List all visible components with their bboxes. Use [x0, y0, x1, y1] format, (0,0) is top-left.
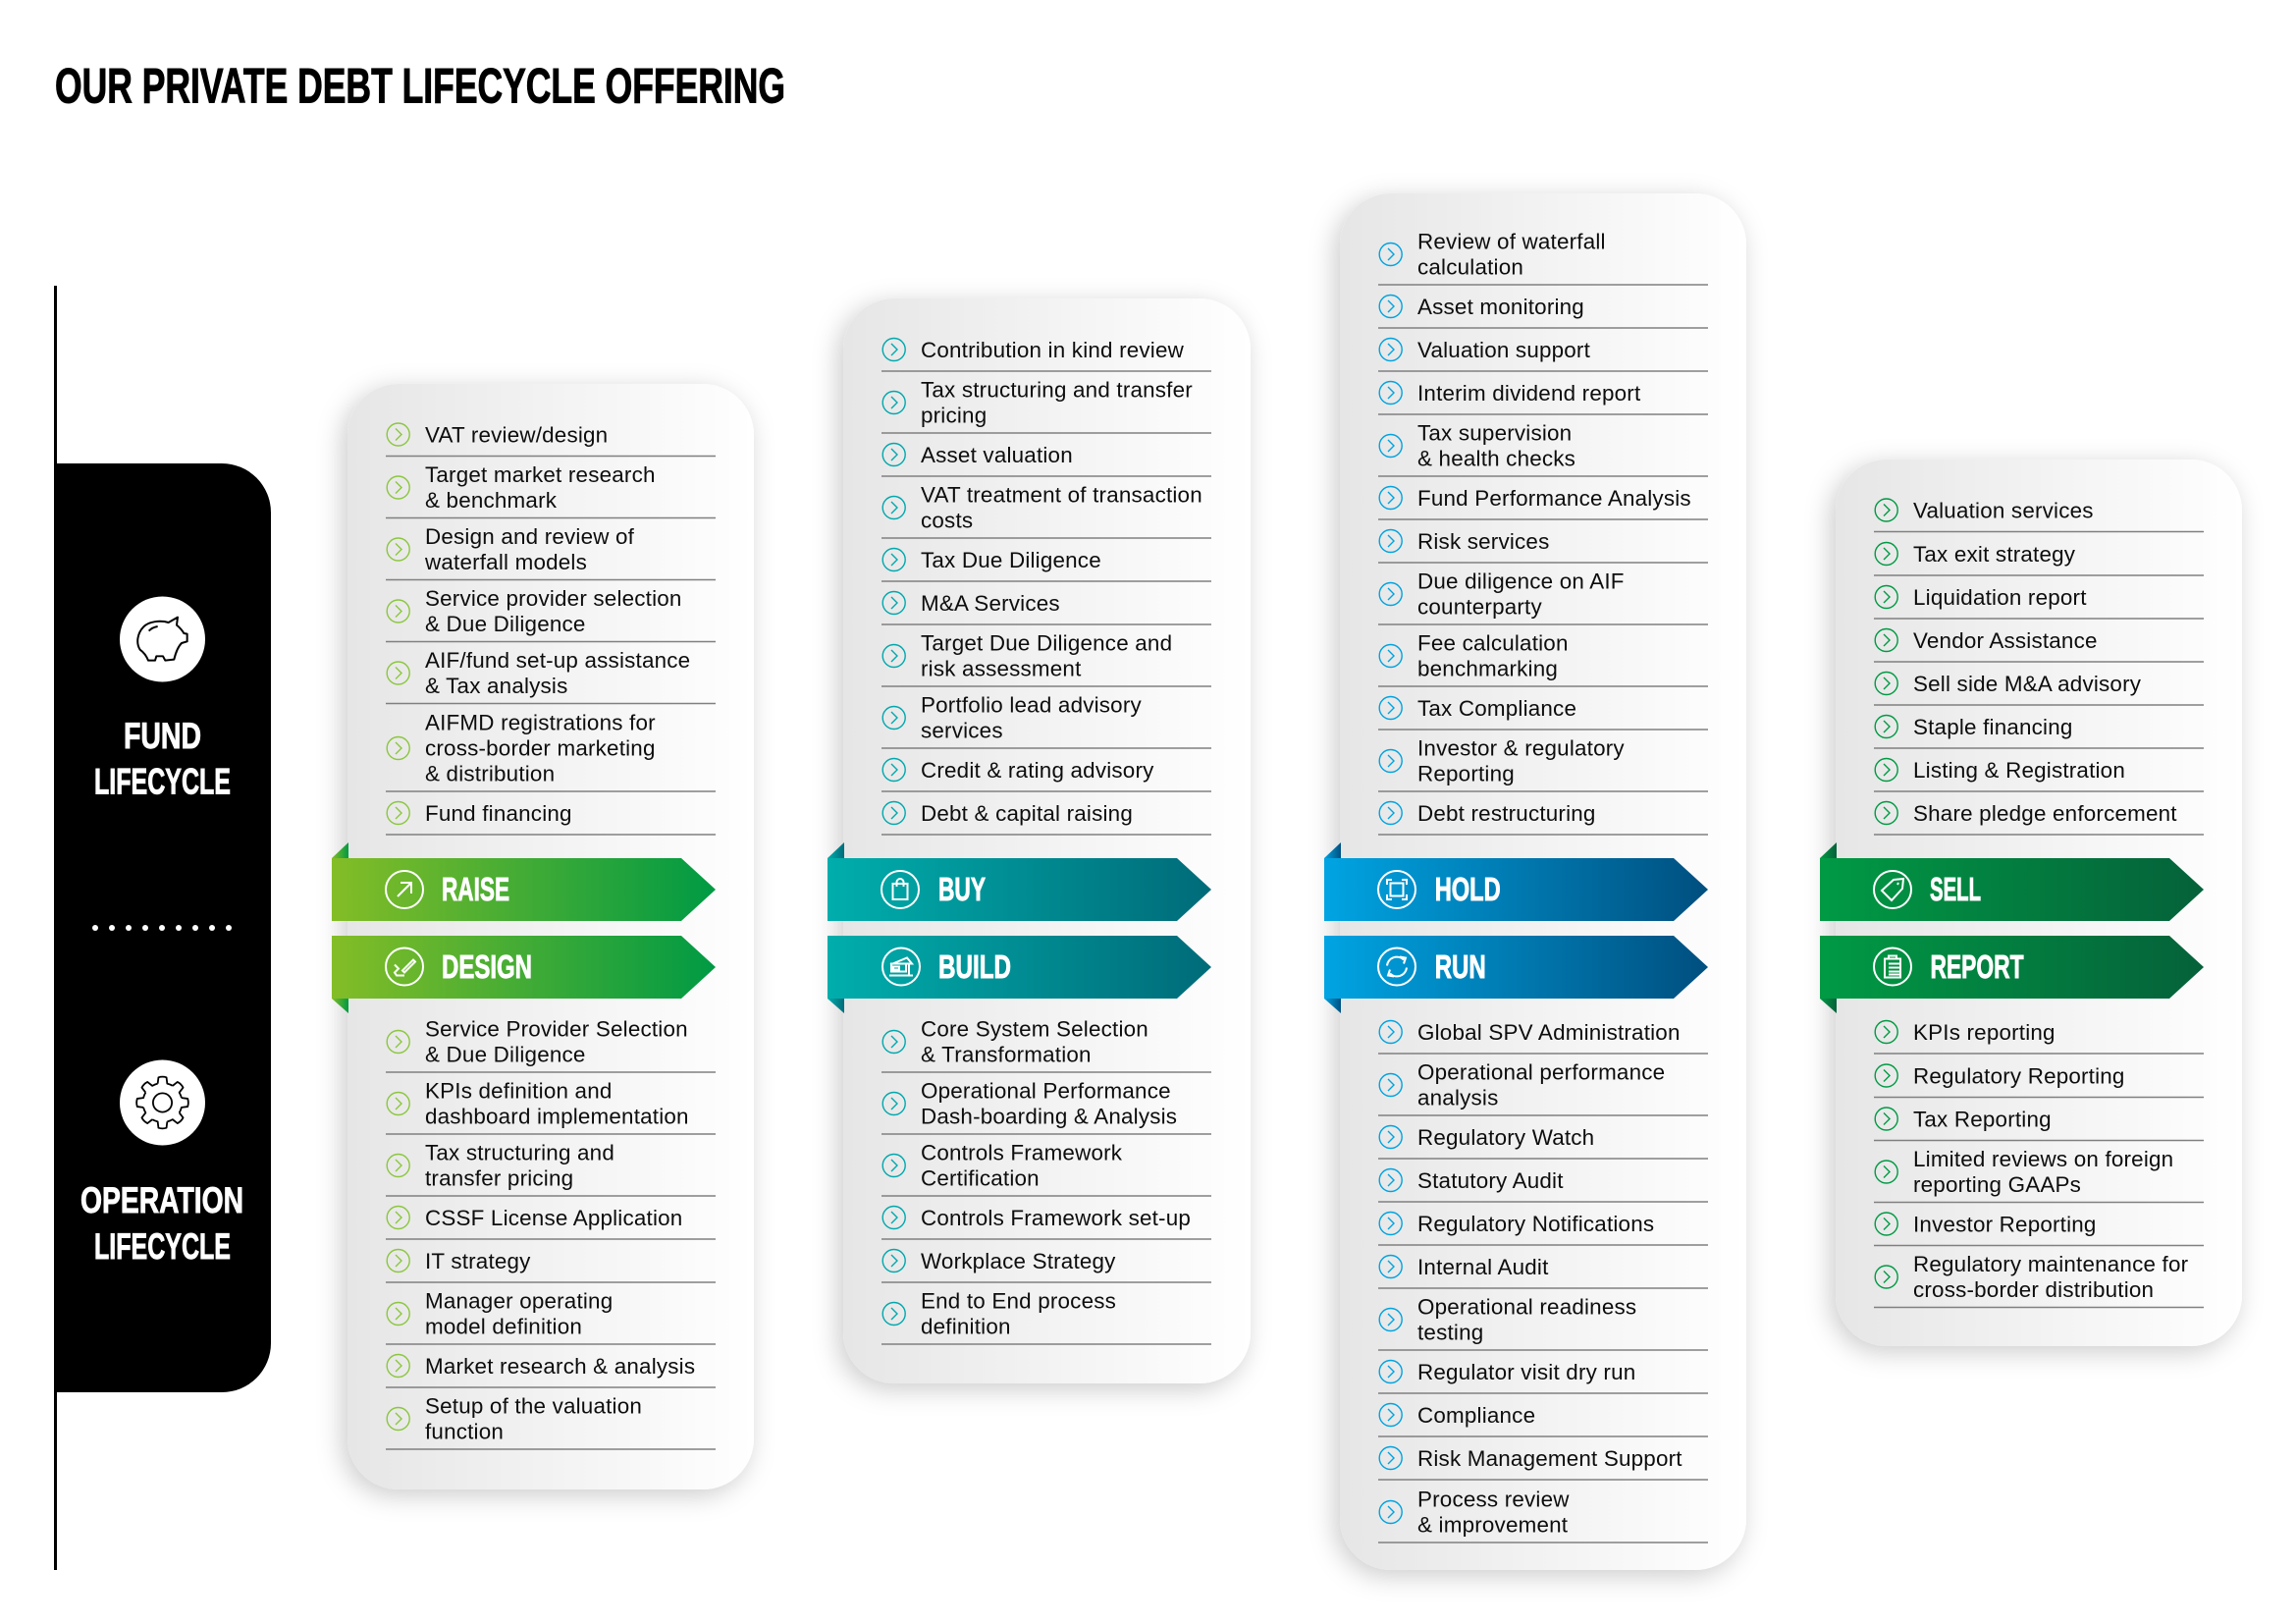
item: Operational readiness testing: Operational readiness	[1417, 1294, 1636, 1320]
black sidebar panel	[54, 463, 271, 1392]
item: Target market research: Target market research	[425, 462, 656, 487]
item: Target Due Diligence: Target Due Diligence and	[921, 630, 1172, 656]
panel: hold and run	[1340, 193, 1746, 1570]
item: Investor & regulatory Reporting: Investor & regulatory	[1417, 736, 1625, 760]
item: Fee calculation benchmarking	[1378, 630, 1708, 686]
heading: fund lifecycle	[94, 716, 231, 801]
heading: operation lifecycle	[80, 1180, 243, 1267]
item: Credit & rating advisory	[881, 758, 1211, 791]
item: Target market research	[386, 462, 716, 518]
item: Operational Performance: Dash-boarding & Analysis	[921, 1104, 1177, 1129]
item: Listing & Registration	[1874, 758, 2204, 791]
item: Limited reviews on foreign reporting GAAPs: Limited reviews on foreign	[1913, 1147, 2173, 1171]
item: KPIs definition	[386, 1078, 716, 1134]
item: VAT treatment: VAT treatment of transaction	[921, 483, 1202, 507]
heading: operation lifecycle: LIFECYCLE	[94, 1226, 231, 1267]
item: Valuation services	[1874, 499, 2204, 532]
item: Risk Management Support	[1378, 1446, 1708, 1480]
item: Controls Framework Certification	[881, 1141, 1211, 1196]
item: Liquidation report	[1874, 585, 2204, 619]
item: Tax supervision: Tax supervision	[1417, 420, 1572, 446]
item: Investor Reporting: Investor Reporting	[1913, 1212, 2097, 1237]
banner: raise	[332, 842, 716, 921]
item: Tax Compliance: Tax Compliance	[1417, 696, 1576, 721]
item: AIFMD registrations: cross-border marketing	[425, 736, 656, 760]
item: Risk services: Risk services	[1417, 529, 1549, 554]
banner: run	[1324, 936, 1708, 1013]
panel: raise and design	[347, 384, 754, 1489]
item: Process review & improvement: Process review	[1417, 1487, 1570, 1512]
item: KPIs reporting: KPIs reporting	[1913, 1020, 2056, 1045]
item: Asset valuation	[881, 443, 1211, 476]
item: Global SPV Administration: Global SPV Administration	[1417, 1020, 1681, 1045]
banner: run: RUN	[1435, 948, 1486, 985]
item: Valuation support	[1378, 338, 1708, 371]
item: Design and review of waterfall models	[386, 524, 716, 579]
item: Debt & capital raising: Debt & capital raising	[921, 801, 1133, 826]
item: End to End process definition	[881, 1288, 1211, 1344]
heading: fund lifecycle: FUND	[124, 716, 201, 756]
item: Target market research: & benchmark	[425, 488, 558, 513]
item: Operational Performance	[881, 1078, 1211, 1134]
icon: gear	[120, 1060, 205, 1145]
item: Tax Due Diligence: Tax Due Diligence	[921, 548, 1101, 572]
item: Debt restructuring	[1378, 801, 1708, 835]
item: Tax structuring: Tax structuring and	[425, 1141, 614, 1164]
item: Global SPV Administration	[1378, 1020, 1708, 1054]
item: Asset monitoring: Asset monitoring	[1417, 295, 1584, 319]
item: Regulatory maintenance: cross-border distribution	[1913, 1277, 2154, 1302]
item: Operational readiness testing: testing	[1417, 1320, 1483, 1345]
item: Operational performance analysis	[1378, 1060, 1708, 1115]
item: Tax structuring and transfer pricing	[881, 377, 1211, 433]
item: Share pledge enforcement	[1874, 801, 2204, 835]
item: Tax structuring: transfer pricing	[425, 1166, 573, 1190]
item: Due diligence on AIF counterparty: Due diligence on AIF	[1417, 569, 1625, 593]
item: VAT review/design: VAT review/design	[425, 422, 608, 448]
item: AIF/fund set-up assistance	[386, 648, 716, 703]
item: Asset valuation: Asset valuation	[921, 443, 1073, 467]
item: AIF/fund set-up assistance: & Tax analysis	[425, 674, 568, 698]
item: Investor & regulatory Reporting	[1378, 736, 1708, 791]
item: Manager operating model	[386, 1288, 716, 1344]
item: Contribution in kind review	[881, 338, 1211, 371]
item: Valuation support: Valuation support	[1417, 338, 1591, 362]
item: M&A Services	[881, 591, 1211, 624]
item: Asset monitoring	[1378, 295, 1708, 328]
item: Controls Framework Certification: Controls Framework	[921, 1141, 1123, 1164]
item: Target Due Diligence: risk assessment	[921, 656, 1082, 681]
item: Statutory Audit: Statutory Audit	[1417, 1168, 1564, 1193]
item: Regulator visit dry run: Regulator visit dry run	[1417, 1360, 1635, 1384]
banner: report: REPORT	[1930, 948, 2024, 985]
item: Investor Reporting	[1874, 1212, 2204, 1245]
item: VAT review/design	[386, 422, 716, 456]
item: Regulatory Notifications: Regulatory Notifications	[1417, 1212, 1654, 1236]
item: Due diligence on AIF counterparty	[1378, 569, 1708, 624]
column: buy / build	[828, 298, 1251, 1383]
item: Target Due Diligence	[881, 630, 1211, 686]
dotted separator	[92, 925, 232, 931]
item: Tax supervision	[1378, 420, 1708, 476]
banner: design	[332, 936, 716, 1013]
item: Service provider selection: & Due Diligence	[425, 612, 586, 636]
item: Operational performance analysis: analysis	[1417, 1086, 1498, 1110]
item: Regulatory Reporting: Regulatory Reporting	[1913, 1064, 2125, 1088]
item: Core System Selection: & Transformation	[921, 1043, 1092, 1066]
item: Setup of the valuation function: function	[425, 1420, 504, 1443]
item: KPIs definition: KPIs definition and	[425, 1078, 613, 1104]
item: Portfolio lead advisory: services	[921, 719, 1003, 742]
banner: hold: HOLD	[1435, 871, 1501, 907]
item: Review of waterfall calculation: calculation	[1417, 255, 1523, 279]
item: AIFMD registrations: AIFMD registrations for	[425, 711, 656, 734]
item: Market research: Market research & analysis	[425, 1354, 695, 1379]
item: Valuation services: Valuation services	[1913, 499, 2094, 522]
item: Fund financing: Fund financing	[425, 801, 572, 826]
item: Staple financing: Staple financing	[1913, 715, 2073, 739]
item: M&A Services: M&A Services	[921, 591, 1060, 616]
item: Service Provider Selection: Service Provider Selection	[425, 1017, 688, 1041]
item: IT strategy: IT strategy	[425, 1249, 531, 1273]
item: Liquidation report: Liquidation report	[1913, 585, 2087, 610]
item: Core System Selection	[881, 1017, 1211, 1072]
item: Regulatory maintenance	[1874, 1252, 2204, 1308]
item: AIFMD registrations: & distribution	[425, 762, 555, 785]
title: OUR PRIVATE DEBT LIFECYCLE OFFERING	[55, 59, 785, 114]
vertical rule	[54, 286, 57, 1570]
item: AIFMD registrations	[386, 711, 716, 791]
item: Regulatory Reporting	[1874, 1064, 2204, 1098]
item: Controls Framework set-up: Controls Framework set-up	[921, 1206, 1191, 1230]
item: Tax structuring and transfer pricing: pricing	[921, 403, 987, 428]
item: CSSF License Application: CSSF License Application	[425, 1206, 682, 1230]
heading: fund lifecycle: LIFECYCLE	[94, 762, 231, 801]
item: Tax supervision: & health checks	[1417, 446, 1575, 471]
panel: buy and build	[843, 298, 1251, 1383]
item: Listing & Registration: Listing & Registration	[1913, 758, 2125, 783]
item: Manager operating model: model definition	[425, 1314, 582, 1339]
item: Process review & improvement: & improvement	[1417, 1512, 1569, 1538]
banner: buy: BUY	[938, 871, 986, 907]
item: Credit & rating advisory: Credit & rating advisory	[921, 758, 1154, 783]
item: CSSF License Application	[386, 1206, 716, 1239]
item: Setup of the valuation function: Setup of the valuation	[425, 1394, 642, 1418]
item: Tax structuring	[386, 1141, 716, 1196]
item: KPIs definition: dashboard implementation	[425, 1104, 689, 1129]
item: Market research	[386, 1354, 716, 1387]
item: Fund financing	[386, 801, 716, 835]
banner: report	[1820, 936, 2204, 1013]
item: Operational readiness testing	[1378, 1294, 1708, 1350]
item: Sell side M&A advisory	[1874, 672, 2204, 705]
item: Sell side M&A advisory: Sell side M&A advisory	[1913, 672, 2142, 696]
panel: sell and report	[1836, 460, 2242, 1346]
heading: operation lifecycle: OPERATION	[80, 1180, 243, 1220]
item: Controls Framework Certification: Certification	[921, 1166, 1040, 1190]
item: Regulatory maintenance: Regulatory maintenance for	[1913, 1252, 2189, 1276]
item: Service Provider Selection	[386, 1017, 716, 1072]
item: Risk services	[1378, 529, 1708, 563]
item: Regulatory Notifications	[1378, 1212, 1708, 1245]
item: Staple financing	[1874, 715, 2204, 748]
item: Review of waterfall calculation	[1378, 230, 1708, 285]
banner: hold	[1324, 842, 1708, 921]
item: Operational performance analysis: Operational performance	[1417, 1060, 1665, 1084]
item: KPIs reporting	[1874, 1020, 2204, 1054]
item: Contribution in kind review: Contribution in kind review	[921, 338, 1185, 362]
banner: raise: RAISE	[442, 871, 509, 907]
item: Design and review of waterfall models: waterfall models	[424, 550, 587, 574]
item: AIF/fund set-up assistance: AIF/fund set-up assistance	[425, 648, 690, 673]
item: Tax Reporting: Tax Reporting	[1913, 1108, 2052, 1131]
item: Fund Performance Analysis: Fund Performance Analysis	[1417, 486, 1691, 511]
item: Tax Due Diligence	[881, 548, 1211, 581]
banner: build: BUILD	[938, 948, 1011, 985]
item: Design and review of waterfall models: Design and review of	[425, 524, 635, 549]
banner: buy	[828, 842, 1211, 921]
item: Vendor Assistance: Vendor Assistance	[1913, 628, 2098, 653]
item: Interim dividend report	[1378, 381, 1708, 414]
item: Controls Framework set-up	[881, 1206, 1211, 1239]
item: Debt restructuring: Debt restructuring	[1417, 801, 1596, 826]
item: Interim dividend report: Interim dividend report	[1417, 381, 1641, 406]
item: Process review & improvement	[1378, 1487, 1708, 1543]
item: Investor & regulatory Reporting: Reporting	[1417, 762, 1515, 785]
item: Share pledge enforcement: Share pledge enforcement	[1913, 801, 2177, 826]
item: Service Provider Selection: & Due Diligence	[425, 1043, 586, 1066]
item: IT strategy	[386, 1249, 716, 1282]
item: Fund Performance Analysis	[1378, 486, 1708, 519]
item: Fee calculation benchmarking: Fee calculation	[1417, 630, 1569, 656]
column: sell / report	[1820, 460, 2242, 1346]
item: Compliance	[1378, 1403, 1708, 1436]
item: VAT treatment	[881, 483, 1211, 538]
item: Core System Selection: Core System Selection	[921, 1017, 1148, 1041]
item: Tax Reporting	[1874, 1108, 2204, 1141]
item: Fee calculation benchmarking: benchmarking	[1417, 656, 1558, 681]
item: Statutory Audit	[1378, 1168, 1708, 1202]
item: Due diligence on AIF counterparty: counterparty	[1417, 595, 1542, 619]
banner: build	[828, 936, 1211, 1013]
item: Tax Compliance	[1378, 696, 1708, 730]
item: VAT treatment: costs	[921, 509, 973, 532]
item: Limited reviews on foreign reporting GAAPs: reporting GAAPs	[1913, 1172, 2081, 1197]
item: Risk Management Support: Risk Management Support	[1417, 1446, 1682, 1471]
item: Tax structuring and transfer pricing: Tax structuring and transfer	[921, 377, 1193, 403]
item: End to End process definition: definition	[921, 1314, 1011, 1339]
item: Debt & capital raising	[881, 801, 1211, 835]
item: Regulatory Watch	[1378, 1125, 1708, 1159]
icon: piggy bank	[120, 597, 205, 681]
item: Limited reviews on foreign reporting GAAPs	[1874, 1147, 2204, 1202]
item: Tax exit strategy	[1874, 542, 2204, 575]
item: End to End process definition: End to End process	[921, 1288, 1116, 1314]
banner: sell: SELL	[1930, 871, 1981, 907]
item: Tax exit strategy: Tax exit strategy	[1913, 542, 2076, 567]
item: Internal Audit	[1378, 1255, 1708, 1288]
item: Compliance: Compliance	[1417, 1403, 1535, 1428]
item: Internal Audit: Internal Audit	[1417, 1255, 1549, 1279]
item: Service provider selection	[386, 586, 716, 642]
item: Operational Performance: Operational Performance	[921, 1078, 1171, 1104]
item: Portfolio lead advisory	[881, 693, 1211, 748]
column: raise / design	[332, 384, 754, 1489]
banner: design: DESIGN	[442, 948, 532, 985]
left sidebar: lifecycle labels	[54, 286, 271, 1570]
item: Manager operating model: Manager operating	[425, 1288, 613, 1314]
banner: sell	[1820, 842, 2204, 921]
item: Workplace Strategy: Workplace Strategy	[921, 1249, 1116, 1273]
item: Portfolio lead advisory: Portfolio lead advisory	[921, 693, 1142, 717]
column: hold / run	[1324, 193, 1746, 1570]
item: Service provider selection: Service provider selection	[425, 586, 682, 611]
item: Setup of the valuation function	[386, 1394, 716, 1449]
item: Review of waterfall calculation: Review of waterfall	[1417, 230, 1606, 253]
item: Regulatory Watch: Regulatory Watch	[1417, 1125, 1594, 1150]
item: Workplace Strategy	[881, 1249, 1211, 1282]
item: Regulator visit dry run	[1378, 1360, 1708, 1393]
item: Vendor Assistance	[1874, 628, 2204, 662]
